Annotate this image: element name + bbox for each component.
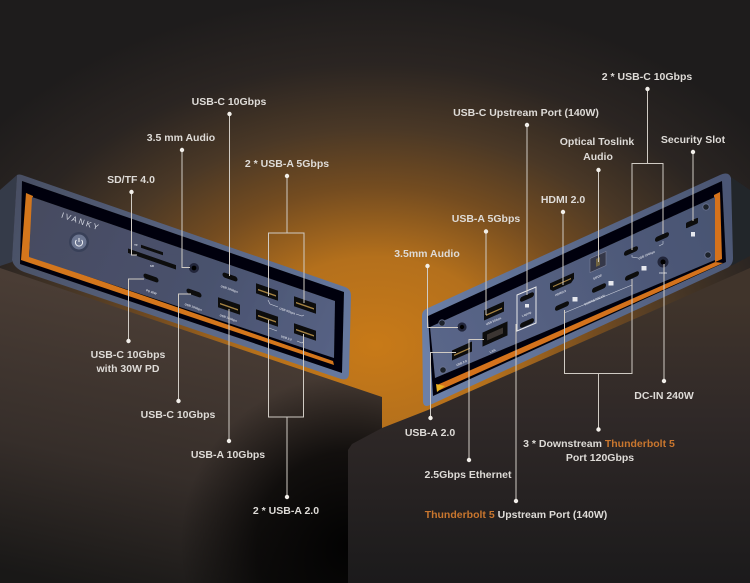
upstream highlight box — [517, 287, 536, 331]
port: USB-A 2.0 — [452, 342, 472, 360]
port: HDMI — [550, 273, 574, 292]
port: Thunderbolt 1 — [555, 300, 569, 312]
callout: SD/TF 4.0 — [107, 174, 155, 255]
tiny port captions: LAN — [489, 348, 496, 354]
callout: Optical Toslink Audio: Optical Toslink — [560, 136, 634, 148]
right ports — [439, 204, 711, 373]
port: 3.5mm audio — [457, 322, 467, 332]
callout: USB-C Upstream Port: USB-C Upstream Port (140W) — [453, 107, 599, 119]
right pedestal block — [348, 268, 750, 583]
power button — [69, 232, 89, 252]
port: DC-IN — [658, 256, 668, 268]
port: USB-C PD — [144, 273, 158, 283]
callout: USB-C 10Gbps lower: USB-C 10Gbps — [141, 409, 215, 421]
tiny port captions: DCIN — [659, 271, 667, 275]
callout: USB-C 10Gbps with 30W PD — [91, 279, 165, 375]
port: LAN — [482, 321, 508, 347]
port: USB-A 5Gbps — [484, 302, 504, 320]
left dock frame — [12, 174, 351, 379]
tiny port captions: USB 5Gbps — [485, 316, 502, 326]
right dock side face — [731, 177, 750, 266]
callout: 2.5Gbps Ethernet — [425, 340, 512, 481]
tiny port captions: DOWNSTREAM — [584, 294, 606, 306]
port: USB-A 10Gbps — [218, 297, 240, 315]
tiny port captions: USB 2.0 — [456, 359, 468, 367]
callout: 2 * USB-A 2.0: 2 * USB-A 2.0 — [253, 505, 319, 517]
port: optical Toslink — [590, 251, 606, 273]
callout: 3.5 mm Audio: 3.5 mm Audio — [147, 132, 215, 144]
callout: HDMI 2.0: HDMI 2.0 — [541, 194, 585, 206]
port: Thunderbolt 2 — [592, 282, 606, 294]
left dock panel — [29, 197, 335, 358]
callout: USB-A 2.0: USB-A 2.0 — [405, 427, 455, 439]
callout: 3.5mm Audio: 3.5mm Audio — [394, 248, 460, 260]
callout: Thunderbolt 5 Upstream Port — [425, 324, 607, 521]
right dock black recess — [428, 181, 726, 396]
tiny port captions — [134, 243, 296, 342]
port: 3.5mm audio — [189, 263, 199, 273]
tiny port captions: USB 5Gbps — [279, 306, 296, 316]
left dock — [0, 174, 351, 379]
Thunderbolt icons — [572, 266, 646, 302]
callout: USB-A 10Gbps: USB-A 10Gbps — [191, 449, 265, 461]
brand logo: IVANKY — [60, 211, 102, 233]
tiny port captions — [456, 249, 667, 367]
tiny port captions: USB 2.0 — [280, 334, 293, 342]
tiny port captions: USB 10Gbps — [219, 313, 238, 323]
tiny port captions: TF — [134, 243, 138, 247]
port: SD slot — [128, 249, 176, 269]
callout: USB-C 10Gbps lower — [141, 294, 215, 421]
callout: USB-A 10Gbps — [191, 309, 265, 461]
port: Thunderbolt 3 — [625, 270, 639, 282]
callout: USB-A 5Gbps: USB-A 5Gbps — [452, 213, 520, 225]
right dock — [422, 174, 750, 406]
callout: 2 * USB-A 5Gbps: 2 * USB-A 5Gbps — [245, 158, 329, 170]
right dock orange light — [437, 192, 723, 390]
callout: Security Slot — [661, 134, 726, 221]
port: USB-A 5Gbps one — [256, 283, 278, 301]
port: upstream Thunderbolt — [520, 317, 534, 329]
callout: USB-A 2.0 — [405, 352, 456, 439]
callout: HDMI 2.0 — [541, 194, 585, 285]
port: USB-C one — [624, 245, 638, 257]
callout: Thunderbolt 5 Upstream Port: Thunderbolt 5 Upstream Port (140W) — [425, 509, 607, 521]
screws — [439, 204, 711, 373]
callout: 3.5mm Audio — [394, 248, 460, 328]
callout: 3 * Downstream Thunderbolt 5 — [523, 279, 675, 464]
right dock frame — [422, 174, 733, 406]
tiny port captions: Laptop — [521, 310, 532, 318]
callout: USB-C 10Gbps top — [192, 96, 266, 276]
left pedestal block — [0, 268, 382, 583]
left dock side face — [0, 175, 17, 266]
port: upstream USB-C — [520, 291, 534, 303]
callout: 2 * USB-A 2.0 — [253, 320, 319, 517]
callout: USB-C 10Gbps top: USB-C 10Gbps — [192, 96, 266, 108]
callout: 3.5 mm Audio — [147, 132, 215, 268]
callout: 3 * Downstream Thunderbolt 5: 3 * Downstream Thunderbolt 5 — [523, 438, 675, 450]
left dock orange light — [21, 193, 334, 365]
tiny port captions: USB 10Gbps — [220, 284, 239, 294]
callout: USB-C 10Gbps with 30W PD: USB-C 10Gbps — [91, 349, 165, 361]
callout: Optical Toslink Audio: Audio — [583, 151, 613, 163]
left ports — [128, 243, 316, 343]
port: USB-A 5Gbps two — [294, 296, 316, 314]
callout: Security Slot: Security Slot — [661, 134, 726, 146]
callout: SD/TF 4.0: SD/TF 4.0 — [107, 174, 155, 186]
left dock black recess — [20, 181, 344, 373]
tiny port captions: SD — [150, 264, 155, 268]
callout: 3 * Downstream Thunderbolt 5: Port 120Gbps — [566, 452, 634, 464]
callout: DC-IN 240W: DC-IN 240W — [634, 390, 694, 402]
tiny port captions: USB 10Gbps — [184, 302, 203, 312]
port: security slot — [686, 218, 698, 228]
callouts: right dock — [394, 71, 726, 521]
port: USB-A 2.0 one — [256, 309, 278, 327]
callout: 2 * USB-C 10Gbps — [602, 71, 692, 250]
callout: Optical Toslink Audio — [560, 136, 634, 262]
tiny port captions: HDMI2.0 — [554, 289, 567, 297]
callout: USB-C Upstream Port — [453, 107, 599, 295]
callout: USB-C 10Gbps with 30W PD: with 30W PD — [95, 363, 160, 375]
port: USB-C upper — [222, 272, 238, 282]
tiny port captions: PD 30W — [145, 288, 157, 296]
callout: USB-A 5Gbps — [452, 213, 520, 315]
callouts: left dock — [91, 96, 329, 517]
port: USB-C two — [655, 231, 669, 243]
port: TF slot — [141, 245, 163, 255]
port: USB-A 2.0 two — [294, 323, 316, 341]
right dock panel — [430, 197, 715, 378]
port: USB-C lower — [186, 288, 202, 298]
yellow corner accents — [436, 384, 445, 392]
callout: 2.5Gbps Ethernet: 2.5Gbps Ethernet — [425, 469, 512, 481]
callout: 2 * USB-A 5Gbps — [245, 158, 329, 303]
callout: DC-IN 240W — [634, 264, 694, 402]
callout: 2 * USB-C 10Gbps: 2 * USB-C 10Gbps — [602, 71, 692, 83]
tiny port captions: USB 10Gbps — [637, 249, 656, 261]
tiny port captions: S/PDIF — [592, 273, 603, 281]
